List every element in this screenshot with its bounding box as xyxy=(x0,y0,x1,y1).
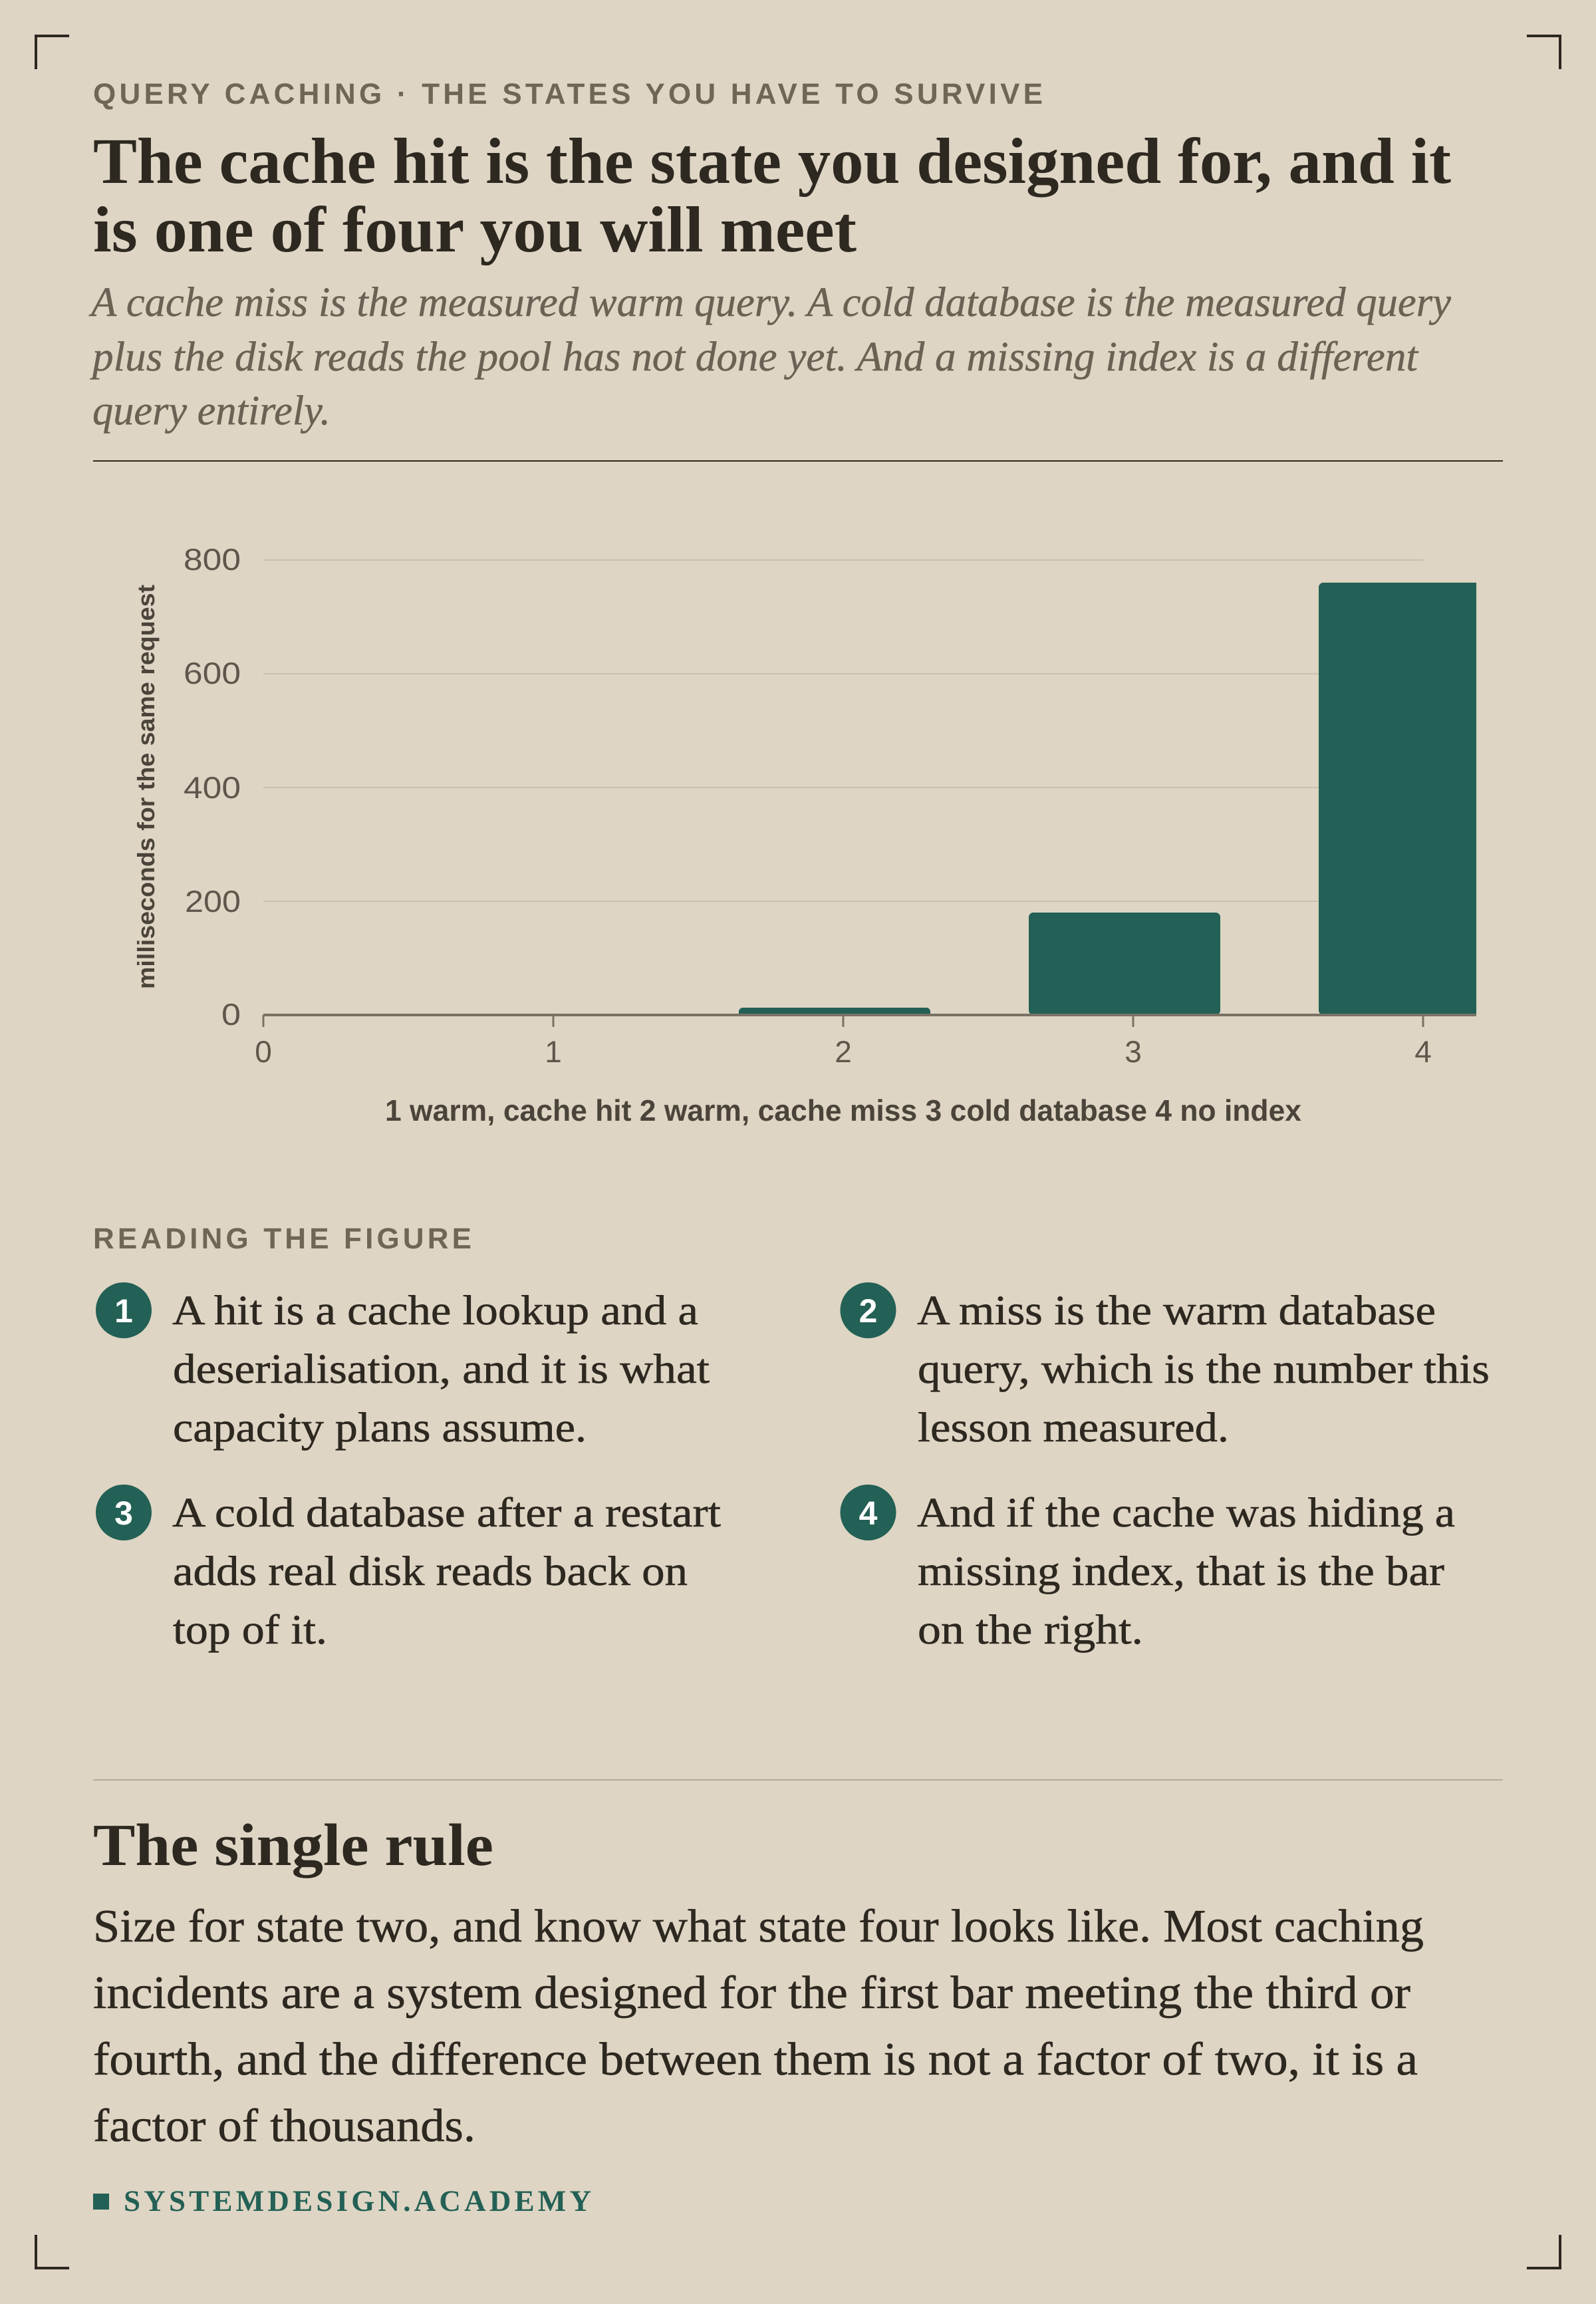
x axis tick labels: 3 xyxy=(1125,1034,1142,1069)
rule paragraph xyxy=(93,1901,1424,2152)
badge 4 xyxy=(841,1485,896,1540)
brand name: SYSTEMDESIGN.ACADEMY xyxy=(124,2184,591,2218)
note 4 xyxy=(841,1485,1455,1653)
subtitle xyxy=(88,279,1451,434)
note 4 text xyxy=(917,1489,1455,1653)
crop mark: bottom right xyxy=(1527,2235,1560,2268)
note 2 xyxy=(841,1282,1490,1451)
subtitle: plus the disk reads the pool has not done yet. And a missing index is a different xyxy=(90,333,1418,380)
note 2 text xyxy=(917,1287,1490,1451)
subtitle: A cache miss is the measured warm query. A cold database is the measured query xyxy=(88,279,1451,325)
footer brand xyxy=(93,2184,591,2218)
crop mark: top right xyxy=(1527,36,1560,69)
title: is one of four you will meet xyxy=(93,194,857,266)
y axis tick labels: 600 xyxy=(184,656,241,690)
x axis tick labels: 1 xyxy=(545,1034,562,1069)
note 2 text: query, which is the number this xyxy=(918,1346,1490,1392)
x axis tick labels xyxy=(255,1034,1432,1069)
section label: reading the figure: READING THE FIGURE xyxy=(93,1223,471,1255)
note 1 text xyxy=(172,1287,710,1451)
x axis line and ticks xyxy=(263,1015,1476,1027)
x axis title: 1 warm, cache hit 2 warm, cache miss 3 cold database 4 no index xyxy=(385,1093,1301,1127)
note 3 text: A cold database after a restart xyxy=(172,1489,722,1536)
x axis tick labels: 2 xyxy=(835,1034,852,1069)
badge 3: 3 xyxy=(114,1495,133,1532)
crop mark: bottom left xyxy=(36,2235,69,2268)
rule paragraph: factor of thousands. xyxy=(93,2100,475,2152)
badge 2 xyxy=(841,1282,896,1338)
note 3 text: top of it. xyxy=(173,1606,327,1653)
bar: cold database xyxy=(1029,913,1220,1015)
bar: warm, cache miss xyxy=(739,1008,930,1015)
note 3 xyxy=(96,1485,722,1653)
header divider xyxy=(93,460,1503,462)
note 2 text: A miss is the warm database xyxy=(917,1287,1436,1334)
note 3 text xyxy=(172,1489,722,1653)
rule paragraph: incidents are a system designed for the first bar meeting the third or xyxy=(93,1967,1410,2019)
brand square xyxy=(93,2194,109,2210)
badge 1: 1 xyxy=(114,1292,133,1330)
badge 4: 4 xyxy=(859,1495,878,1532)
heading: the single rule: The single rule xyxy=(93,1812,493,1878)
note 4 text: on the right. xyxy=(918,1606,1143,1653)
badge 3 xyxy=(96,1485,152,1540)
x axis tick labels: 4 xyxy=(1414,1034,1432,1069)
x axis tick labels: 0 xyxy=(255,1034,272,1069)
y axis tick labels: 400 xyxy=(184,770,241,805)
subtitle: query entirely. xyxy=(92,387,331,434)
bar: no index xyxy=(1319,583,1476,1015)
note 1 text: A hit is a cache lookup and a xyxy=(172,1287,698,1334)
note 3 text: adds real disk reads back on xyxy=(173,1548,688,1594)
note 4 text: missing index, that is the bar xyxy=(918,1548,1444,1594)
badge 1 xyxy=(96,1282,152,1338)
eyebrow: QUERY CACHING · THE STATES YOU HAVE TO SURVIVE xyxy=(93,78,1043,110)
y axis tick labels xyxy=(184,542,241,1032)
note 4 text: And if the cache was hiding a xyxy=(917,1489,1455,1536)
bar chart xyxy=(132,542,1476,1127)
section divider xyxy=(93,1779,1503,1781)
note 1 text: deserialisation, and it is what xyxy=(173,1346,710,1392)
note 1 xyxy=(96,1282,710,1451)
note 1 text: capacity plans assume. xyxy=(173,1404,587,1451)
rule paragraph: fourth, and the difference between them is not a factor of two, it is a xyxy=(93,2034,1418,2085)
crop mark: top left xyxy=(36,36,69,69)
gridlines xyxy=(263,560,1423,901)
badge 2: 2 xyxy=(859,1292,877,1330)
title xyxy=(93,126,1451,266)
note 2 text: lesson measured. xyxy=(918,1404,1229,1451)
title: The cache hit is the state you designed for, and it xyxy=(93,126,1451,198)
y axis tick labels: 0 xyxy=(221,997,241,1032)
y axis tick labels: 800 xyxy=(184,542,241,577)
y axis tick labels: 200 xyxy=(185,884,241,919)
y axis title: milliseconds for the same request xyxy=(132,585,160,989)
rule paragraph: Size for state two, and know what state four looks like. Most caching xyxy=(93,1901,1424,1952)
bar: warm, cache hit xyxy=(449,1014,640,1015)
